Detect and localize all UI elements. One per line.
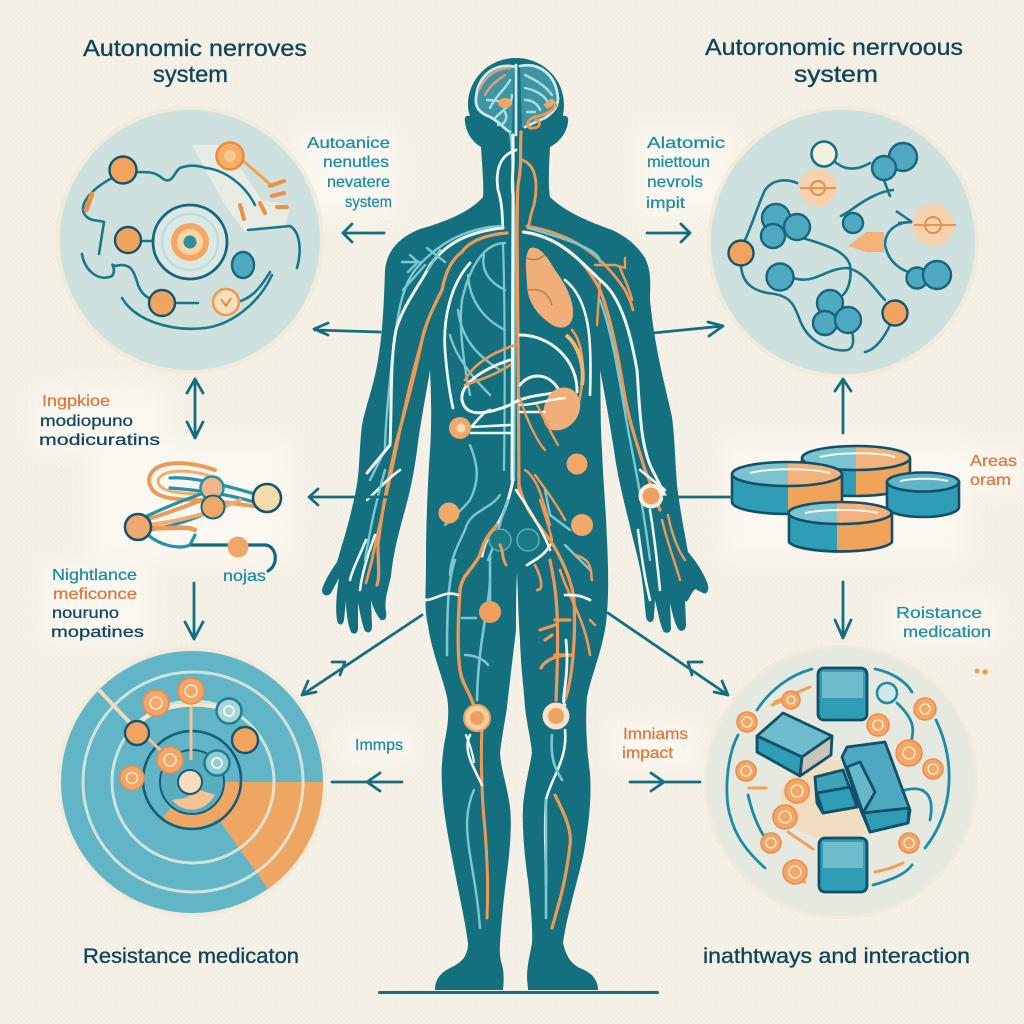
icon: pale node [812,142,836,166]
text block: upper right label [646,135,725,212]
arrow: to upper left panel [343,224,384,242]
arrow: to upper right panel [647,224,690,242]
arrow: pills down [835,582,851,638]
text block: upper left label: nenutles [323,154,389,171]
icon: orange halos [799,169,956,246]
text block: upper right label: impit [646,195,686,212]
text block: upper left label: nevatere [327,174,390,191]
body silhouette [322,58,708,990]
text block: immune impact label [622,726,688,762]
text block: resistance medication label [896,605,991,641]
label: imps: Immps [355,737,403,754]
text block: upper left label [307,135,392,211]
title: top right: system [794,61,878,87]
arrow: vertical double [187,379,203,438]
icon: orange pathway nodes [736,683,943,884]
title: top right [705,34,963,87]
human body with nerve network [322,58,708,990]
brain [476,65,558,135]
panel: upper right nerve circle [707,106,979,378]
spinal cord nerves [497,132,536,490]
text block: immune impact label: impact [622,745,674,762]
title: top right: Autoronomic nerrvoous [705,34,963,60]
label: nojas: nojas [223,568,266,585]
lungs and ribs [445,243,505,470]
icon: cone [848,232,884,252]
arrow: up to upper right panel [835,379,851,433]
left leg nerves [426,525,506,928]
text block: upper left label: Autoanice [307,135,390,152]
icon: orbit nodes [120,678,258,790]
text block: areas label: oram [970,472,1011,489]
pill: left [732,462,842,514]
arrow: connector to pills [664,496,731,498]
text block: upper right label: miettoun [647,154,710,171]
left arm nerves [350,226,507,590]
title: top left [83,35,307,87]
icon: nerve tangle [125,463,281,571]
arrow: diagonal left [302,615,422,695]
pill: front [788,502,892,553]
text block: left medications label: Ingpkioe [42,393,110,410]
stomach and intestines [462,335,580,450]
pelvis [489,529,539,551]
text block: resistance medication label: Roistance [896,605,982,622]
icon: cell clusters [761,143,951,335]
pill: back [802,446,910,496]
icon: blocks [757,668,910,892]
text block: upper right label: Alatomic [647,135,725,152]
caption: resistance medication: Resistance medicaton [83,945,299,968]
text block: upper right label: nevrols [647,174,703,191]
text block: left resistance label: meficonce [53,586,137,603]
icon: central node [178,770,202,794]
text block: areas label: Areas [970,453,1017,470]
arrow: tangle to lower circle [185,583,203,639]
text block: left resistance label: Nightlance [52,567,137,584]
right arm nerves [523,226,685,600]
panel: upper left nerve circle [56,106,324,374]
body nodes [438,417,664,731]
icon: central target [153,205,227,279]
chart: lower left concentric circle [57,647,327,917]
right leg nerves [527,545,595,928]
arrow: to lower right panel [630,773,700,791]
text block: resistance medication label: medication [903,624,991,641]
icon: pills [732,446,959,553]
arrow: to lower left chart [332,773,402,791]
text block: left medications label: modiopuno [40,413,133,430]
arrow: diagonal right [608,613,728,695]
text block: left medications label: modicuratins [39,432,160,449]
text block: areas label [970,453,1017,489]
text block: left resistance label: mopatines [51,624,144,641]
arrow: body to upper right panel [653,322,723,336]
icon: node cluster [110,142,254,316]
icon: orange nodes [728,240,908,326]
panel: lower right pathways circle [704,645,978,919]
pill: right [887,472,959,517]
text block: left resistance label [51,567,144,641]
arrow: body to upper left panel [314,323,380,335]
heart organ [526,248,591,405]
title: top left: system [153,61,228,87]
caption: pathways and interaction: inathtways and interaction [703,945,970,968]
text block: left medications label [39,393,160,449]
abdominal nerves [445,445,590,700]
text block: immune impact label: Imniams [623,726,688,743]
text block: upper left label: system [345,194,392,211]
text block: left resistance label: nouruno [52,605,119,622]
label: small orange dots [975,669,988,675]
title: top left: Autonomic nerroves [83,35,307,61]
arrow: to nerve tangle [309,489,390,505]
ground line [378,991,659,994]
